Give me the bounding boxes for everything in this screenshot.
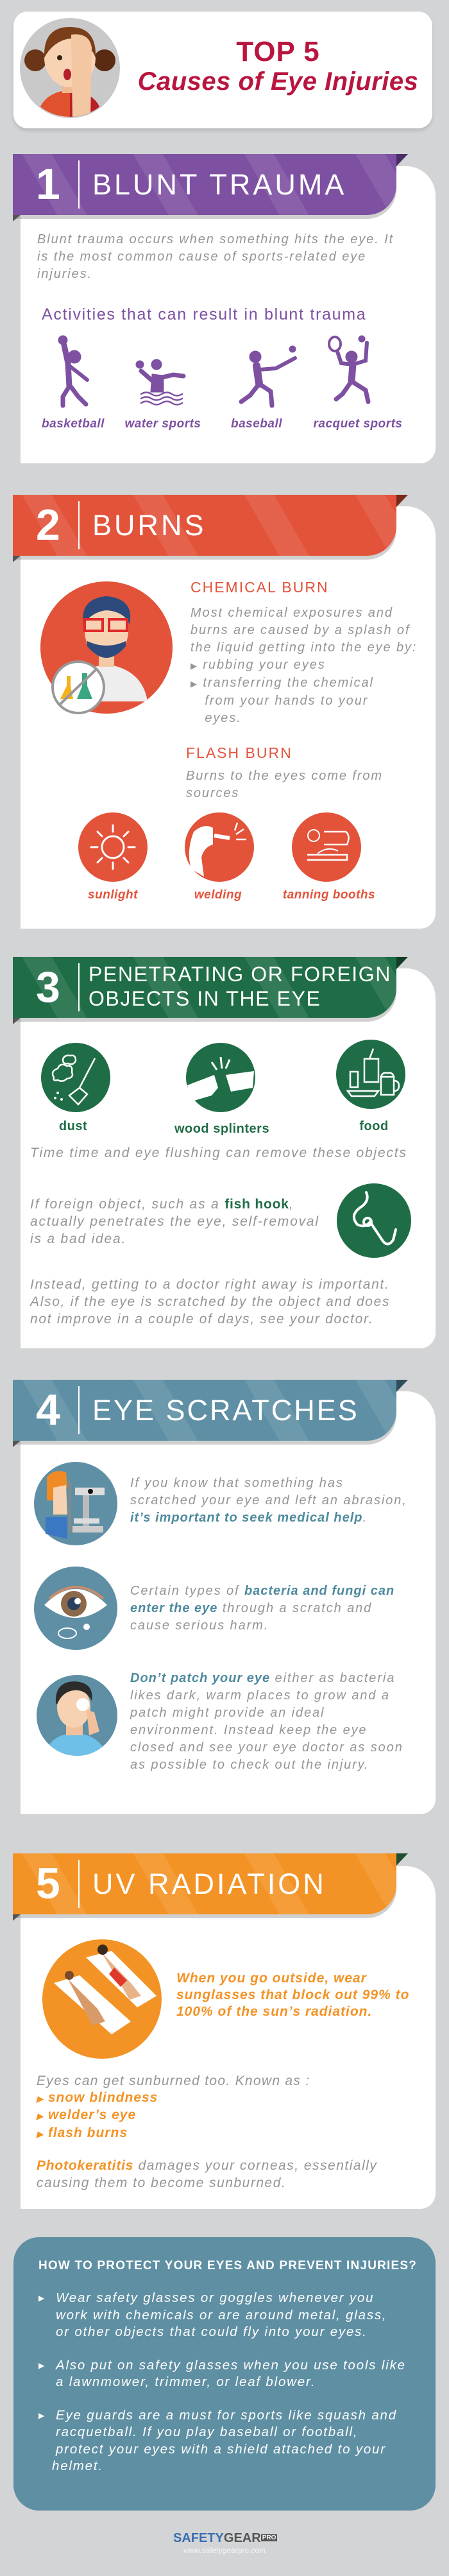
- icon: sunlight: [78, 812, 148, 882]
- text: bacteria and fungi: cause serious harm.: [130, 1619, 269, 1633]
- text: fish hook: is a bad idea.: [30, 1232, 126, 1246]
- panel: burns: [21, 506, 436, 929]
- text: fish hook: [30, 1197, 319, 1246]
- list: protection tips: Wear safety glasses or goggles whenever you: [56, 2290, 374, 2305]
- text: photokeratitis: [37, 2158, 377, 2190]
- text: don't patch: Don’t patch your eye either as bacteria: [130, 1671, 395, 1685]
- list: protection tips: ▶: [38, 2294, 46, 2303]
- title: Causes of Eye Injuries: [138, 67, 418, 96]
- banner: 5 uv radiation: [13, 1853, 396, 1914]
- text: flash burn: [186, 769, 383, 800]
- text: flash burn: Burns to the eyes come from: [186, 769, 383, 783]
- text: seek medical help: scratched your eye and left an abrasion,: [130, 1493, 407, 1507]
- banner: 3 penetrating or foreign objects: [13, 957, 396, 1018]
- text: flash burn: sources: [186, 786, 239, 800]
- text: seek medical help: it’s important to seek medical help.: [130, 1511, 368, 1525]
- list: protection tips: Also put on safety glasses when you use tools like: [56, 2358, 406, 2372]
- labels: sports: baseball: [231, 417, 282, 431]
- text: eyes can get sunburned: Eyes can get sunburned too. Known as :: [37, 2074, 310, 2088]
- labels: flash burn sources: sunlight: [88, 888, 138, 902]
- banner: 2 burns: BURNS: [92, 509, 207, 542]
- text: blunt trauma description: Blunt trauma occurs when something hits the eye. It: [37, 232, 394, 246]
- icon: dust: [41, 1043, 110, 1112]
- text: see doctor: Instead, getting to a doctor right away is important.: [30, 1277, 390, 1292]
- labels: flash burn sources: tanning booths: [283, 888, 375, 902]
- text: wear sunglasses: 100% of the sun’s radiation.: [176, 2004, 372, 2019]
- text: eyes can get sunburned: [36, 2074, 310, 2140]
- icon: baseball: [239, 345, 297, 408]
- text: bacteria and fungi: enter the eye through a scratch and: [130, 1601, 372, 1615]
- text: don't patch: environment. Instead keep the eye: [130, 1723, 368, 1737]
- header card: [13, 12, 432, 128]
- list: protection tips: [38, 2290, 406, 2473]
- labels: foreign objects: wood splinters: [174, 1122, 269, 1136]
- logo: safety gear pro: [173, 2531, 277, 2555]
- icon: racquet sports: [328, 335, 371, 404]
- heading: activities: Activities that can result in blunt trauma: [42, 305, 366, 323]
- text: don't patch: closed and see your eye doctor as soon: [130, 1740, 403, 1755]
- text: bacteria and fungi: [130, 1584, 394, 1633]
- text: blunt trauma description: injuries.: [37, 267, 92, 281]
- text: wear sunglasses: When you go outside, wear: [176, 1971, 367, 1986]
- list: protection tips: protect your eyes with a shield attached to your: [56, 2441, 386, 2457]
- icon: eye exam: [34, 1462, 117, 1545]
- list: protection tips: helmet.: [52, 2459, 103, 2473]
- text: flushing: Time time and eye flushing can remove these objects: [30, 1146, 407, 1160]
- text: don't patch: [130, 1671, 403, 1772]
- heading: flash burn: FLASH BURN: [186, 744, 292, 761]
- banner: 4 eye scratches: EYE SCRATCHES: [92, 1394, 359, 1427]
- banner: 3 penetrating or foreign objects: 3: [36, 963, 60, 1011]
- banner: 4 eye scratches: 4: [36, 1386, 60, 1434]
- labels: flash burn sources: welding: [194, 888, 242, 902]
- panel: foreign objects: [21, 968, 436, 1348]
- text: chemical burn: eyes.: [205, 711, 242, 725]
- text: see doctor: [30, 1277, 390, 1327]
- icon: scientist: [40, 581, 173, 714]
- banner: 1 blunt trauma: BLUNT TRAUMA: [92, 168, 346, 201]
- text: fish hook: actually penetrates the eye, self-removal: [30, 1214, 319, 1229]
- banner: 5 uv radiation: 5: [36, 1859, 60, 1908]
- text: bacteria and fungi: Certain types of bacteria and fungi can: [130, 1584, 394, 1598]
- banner: 3 penetrating or foreign objects: PENETRATING OR FOREIGN: [89, 963, 391, 986]
- panel: eye scratches: [21, 1391, 436, 1814]
- banner: 1 blunt trauma: [13, 154, 396, 215]
- heading: how to protect: HOW TO PROTECT YOUR EYES AND PREVENT INJURIES?: [38, 2259, 417, 2272]
- icon: water sports: [136, 359, 186, 406]
- text: wear sunglasses: sunglasses that block out 99% to: [176, 1988, 409, 2002]
- panel: how to protect: [13, 2237, 436, 2511]
- text: see doctor: not improve in a couple of days, see your doctor.: [30, 1312, 373, 1327]
- list: protection tips: Eye guards are a must for sports like squash and: [56, 2408, 397, 2422]
- icon: wood splinters: [186, 1043, 255, 1112]
- banner: 2 burns: 2: [36, 501, 60, 549]
- labels: flash burn sources: [88, 888, 375, 902]
- icon: fish hook: [337, 1183, 411, 1258]
- text: eyes can get sunburned: ▶ snow blindness: [37, 2090, 158, 2105]
- text: don't patch: likes dark, warm places to grow and a: [130, 1688, 390, 1703]
- labels: foreign objects: dust: [59, 1119, 87, 1133]
- list: protection tips: racquetball. If you play baseball or football,: [56, 2425, 358, 2439]
- heading: chemical burn: CHEMICAL BURN: [191, 579, 329, 596]
- icon: food: [336, 1040, 405, 1109]
- text: seek medical help: [130, 1476, 407, 1525]
- banner: 5 uv radiation: UV RADIATION: [92, 1868, 326, 1900]
- logo: safety gear pro: www.safetygearpro.com: [183, 2546, 266, 2555]
- title: TOP 5: [236, 36, 320, 67]
- labels: foreign objects: food: [359, 1119, 389, 1133]
- labels: foreign objects: [59, 1119, 389, 1136]
- text: chemical burn: ▶ transferring the chemical: [191, 676, 374, 690]
- logo: safety gear pro: SAFETYGEARPRO: [173, 2531, 276, 2545]
- text: don't patch: as possible to check out the injury.: [130, 1758, 369, 1772]
- banner: 1 blunt trauma: 1: [36, 160, 60, 209]
- text: don't patch: patch might provide an ideal: [130, 1706, 325, 1720]
- list: protection tips: work with chemicals or are around metal, glass,: [56, 2308, 387, 2322]
- icon: man with eye patch: [37, 1675, 117, 1756]
- text: chemical burn: from your hands to your: [205, 694, 368, 708]
- list: protection tips: ▶: [38, 2410, 46, 2419]
- text: chemical burn: ▶ rubbing your eyes: [191, 658, 326, 672]
- text: chemical burn: Most chemical exposures and: [191, 606, 393, 620]
- text: wear sunglasses: [176, 1971, 409, 2019]
- text: fish hook: If foreign object, such as a fish hook,: [30, 1197, 294, 1212]
- icon: eye with bacteria: [34, 1567, 117, 1650]
- text: eyes can get sunburned: ▶ flash burns: [37, 2125, 128, 2140]
- panel: blunt trauma: [21, 166, 436, 463]
- list: protection tips: or other objects that could fly into your eyes.: [56, 2324, 368, 2339]
- icon: basketball: [58, 335, 89, 408]
- labels: sports: water sports: [125, 417, 201, 431]
- icon: girl covering eye: [20, 18, 120, 118]
- text: eyes can get sunburned: ▶ welder’s eye: [37, 2108, 136, 2122]
- labels: sports: [42, 417, 402, 431]
- panel: uv radiation: [21, 1866, 436, 2209]
- text: blunt trauma description: [37, 232, 394, 281]
- text: photokeratitis: Photokeratitis damages your corneas, essentially: [37, 2158, 377, 2173]
- icon: sunbathers: [42, 1939, 162, 2059]
- text: chemical burn: burns are caused by a splash of: [191, 623, 410, 637]
- icons: sports: [58, 335, 371, 408]
- labels: sports: racquet sports: [314, 417, 402, 431]
- banner: 2 burns: [13, 495, 396, 556]
- text: chemical burn: [191, 606, 417, 725]
- icon: tanning booth: [292, 812, 361, 882]
- text: chemical burn: the liquid getting into the eye by:: [191, 640, 417, 655]
- text: blunt trauma description: is the most common cause of sports-related eye: [37, 250, 366, 264]
- title: [138, 36, 418, 96]
- text: photokeratitis: causing them to become sunburned.: [37, 2176, 286, 2190]
- list: protection tips: a lawnmower, trimmer, or leaf blower.: [56, 2374, 316, 2389]
- banner: 3 penetrating or foreign objects: OBJECTS IN THE EYE: [89, 987, 321, 1010]
- labels: sports: basketball: [42, 417, 105, 431]
- text: seek medical help: If you know that something has: [130, 1476, 344, 1490]
- banner: 4 eye scratches: [13, 1380, 396, 1441]
- icon: welding: [185, 812, 254, 882]
- list: protection tips: ▶: [38, 2360, 46, 2369]
- text: see doctor: Also, if the eye is scratched by the object and does: [30, 1294, 390, 1309]
